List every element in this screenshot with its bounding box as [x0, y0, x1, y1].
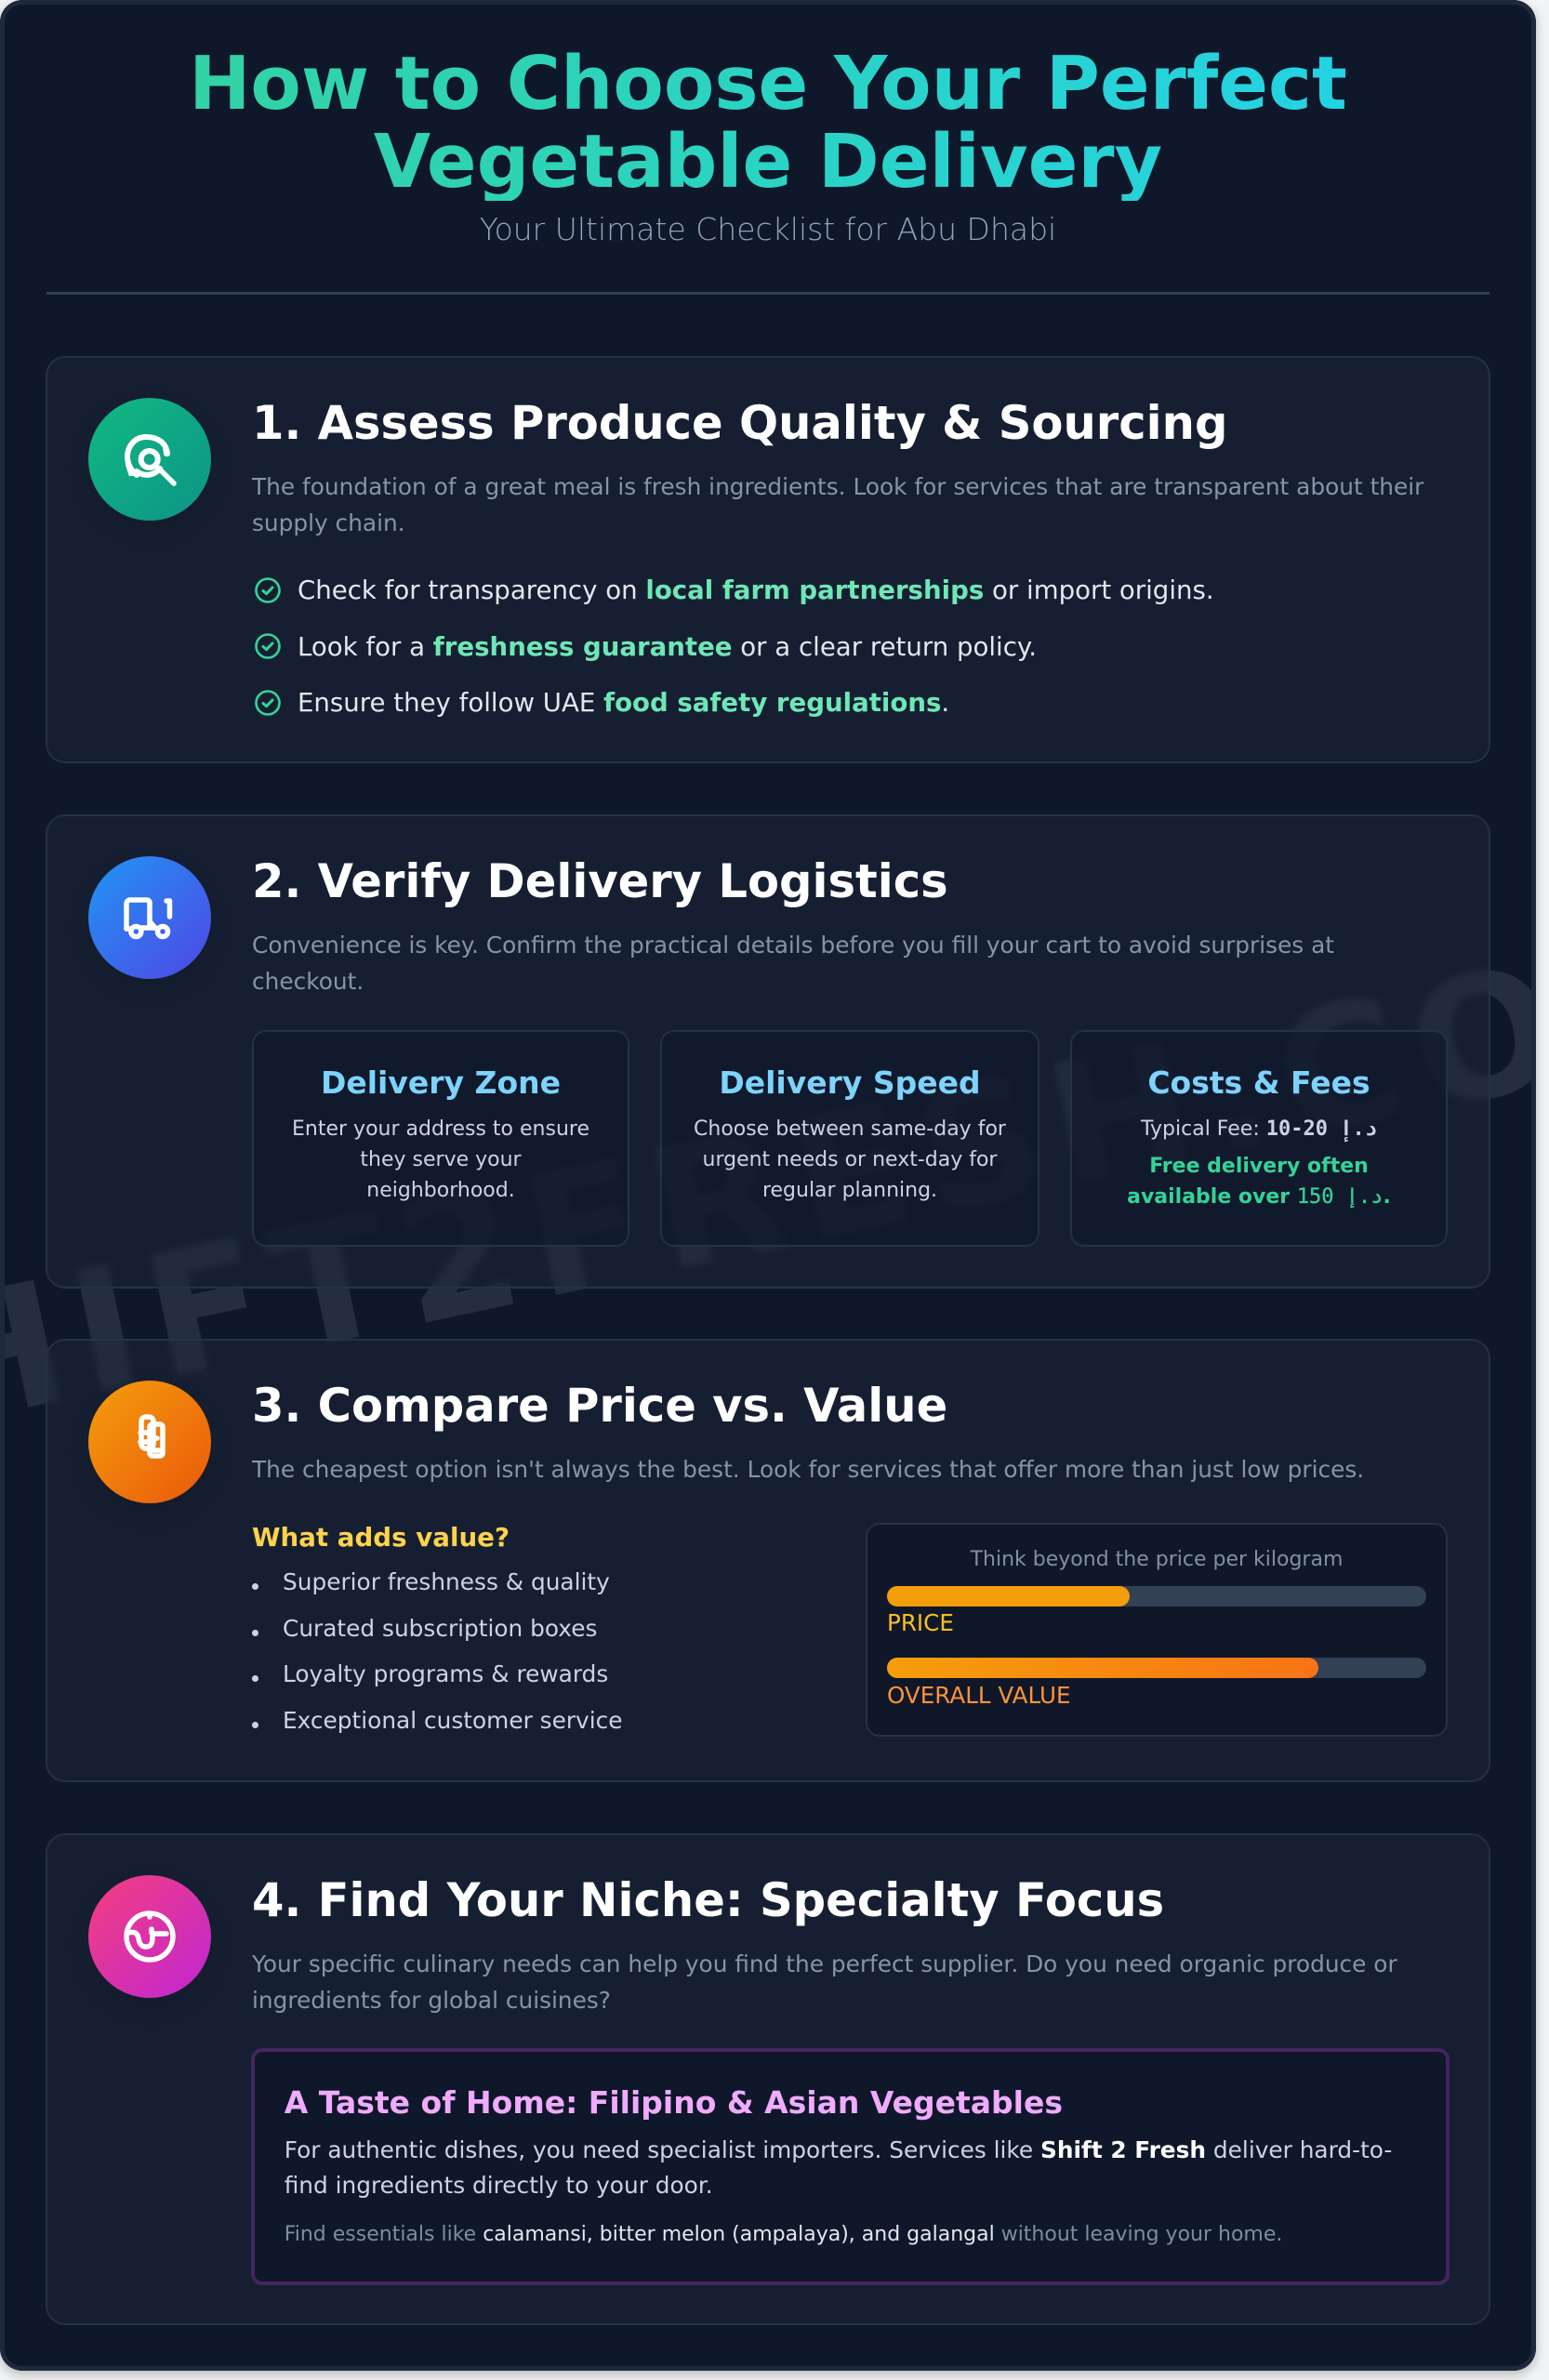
description: ingredients for global cuisines?: [252, 1987, 611, 2014]
text: urgent needs or next-day for: [703, 1148, 997, 1171]
text: [292, 1117, 589, 1202]
icon: magnifier: [88, 398, 211, 521]
icon: check 2: [255, 633, 281, 659]
heading: 1. Assess Produce Quality & Sourcing: [252, 396, 1227, 450]
sub-heading: Delivery Zone: [321, 1064, 561, 1101]
sub-heading: what adds value: What adds value?: [252, 1522, 510, 1553]
bar: price: [887, 1586, 1426, 1606]
icon: truck: [88, 856, 211, 979]
panel: verify delivery logistics: [46, 815, 1489, 1288]
description: Convenience is key. Confirm the practical details before you fill your cart to avoid surprises at: [252, 932, 1334, 959]
callout heading: A Taste of Home: Filipino & Asian Vegetables: [285, 2084, 1063, 2120]
description: [251, 473, 1424, 536]
callout note: Find essentials like calamansi, bitter melon (ampalaya), and galangal without leaving your home.: [285, 2223, 1282, 2246]
description: [252, 932, 1334, 995]
value item 4: Exceptional customer service: [283, 1707, 622, 1734]
panel: assess produce quality and sourcing: [46, 357, 1489, 762]
free delivery note: available over 150 د.إ.: [1127, 1185, 1391, 1209]
callout body: [285, 2136, 1392, 2199]
heading: 2. Verify Delivery Logistics: [252, 854, 948, 908]
value item 2: Curated subscription boxes: [283, 1615, 597, 1642]
free delivery note: [1127, 1155, 1391, 1209]
description: checkout.: [252, 968, 364, 995]
panel: compare price vs value: [46, 1340, 1489, 1781]
checklist item 1: Check for transparency on local farm partnerships or import origins.: [298, 575, 1214, 605]
icon: specialty: [88, 1875, 211, 1998]
label: price: PRICE: [887, 1609, 954, 1636]
sub-heading: Costs & Fees: [1147, 1064, 1370, 1101]
callout body: For authentic dishes, you need specialist importers. Services like Shift 2 Fresh deliver hard-to-: [285, 2136, 1392, 2163]
icon: check 3: [255, 690, 281, 716]
title: Vegetable Delivery: [374, 118, 1162, 205]
typical fee: Typical Fee: 10-20 د.إ: [1141, 1117, 1377, 1141]
text: Enter your address to ensure: [292, 1117, 589, 1141]
chart caption: Think beyond the price per kilogram: [971, 1548, 1343, 1571]
icon: check 1: [255, 577, 281, 603]
description: Your specific culinary needs can help you find the perfect supplier. Do you need organic produce or: [252, 1950, 1397, 1977]
description: The foundation of a great meal is fresh ingredients. Look for services that are transparent about their: [252, 473, 1423, 500]
panel: find your niche: [46, 1834, 1489, 2324]
description: supply chain.: [252, 509, 405, 536]
sub-panel: costs and fees: [1071, 1031, 1447, 1246]
callout body: find ingredients directly to your door.: [285, 2172, 713, 2199]
sub-panel: delivery zone: [253, 1031, 629, 1246]
text: regular planning.: [762, 1179, 937, 1202]
bar: overall value: [887, 1658, 1426, 1678]
title: [0, 45, 1536, 201]
free delivery note: Free delivery often: [1149, 1155, 1369, 1178]
text: Choose between same-day for: [694, 1117, 1006, 1141]
heading: 3. Compare Price vs. Value: [252, 1379, 947, 1433]
subtitle: Your Ultimate Checklist for Abu Dhabi: [480, 211, 1056, 247]
checklist item 3: Ensure they follow UAE food safety regulations.: [298, 687, 949, 718]
chart: price vs overall value: [867, 1524, 1447, 1736]
label: overall value: OVERALL VALUE: [887, 1682, 1071, 1709]
text: neighborhood.: [366, 1179, 515, 1202]
value item 1: Superior freshness & quality: [283, 1568, 610, 1595]
text: [694, 1117, 1006, 1202]
value item 3: Loyalty programs & rewards: [283, 1660, 608, 1687]
text: they serve your: [360, 1148, 522, 1171]
icon: coins: [88, 1381, 211, 1503]
description: [252, 1950, 1397, 2014]
callout: a taste of home: [251, 2047, 1450, 2285]
sub-panel: delivery speed: [661, 1031, 1039, 1246]
description: The cheapest option isn't always the best. Look for services that offer more than just low prices.: [252, 1456, 1364, 1483]
sub-heading: Delivery Speed: [719, 1064, 981, 1101]
title: How to Choose Your Perfect: [189, 40, 1347, 126]
checklist item 2: Look for a freshness guarantee or a clear return policy.: [298, 630, 1037, 662]
heading: 4. Find Your Niche: Specialty Focus: [252, 1873, 1164, 1927]
